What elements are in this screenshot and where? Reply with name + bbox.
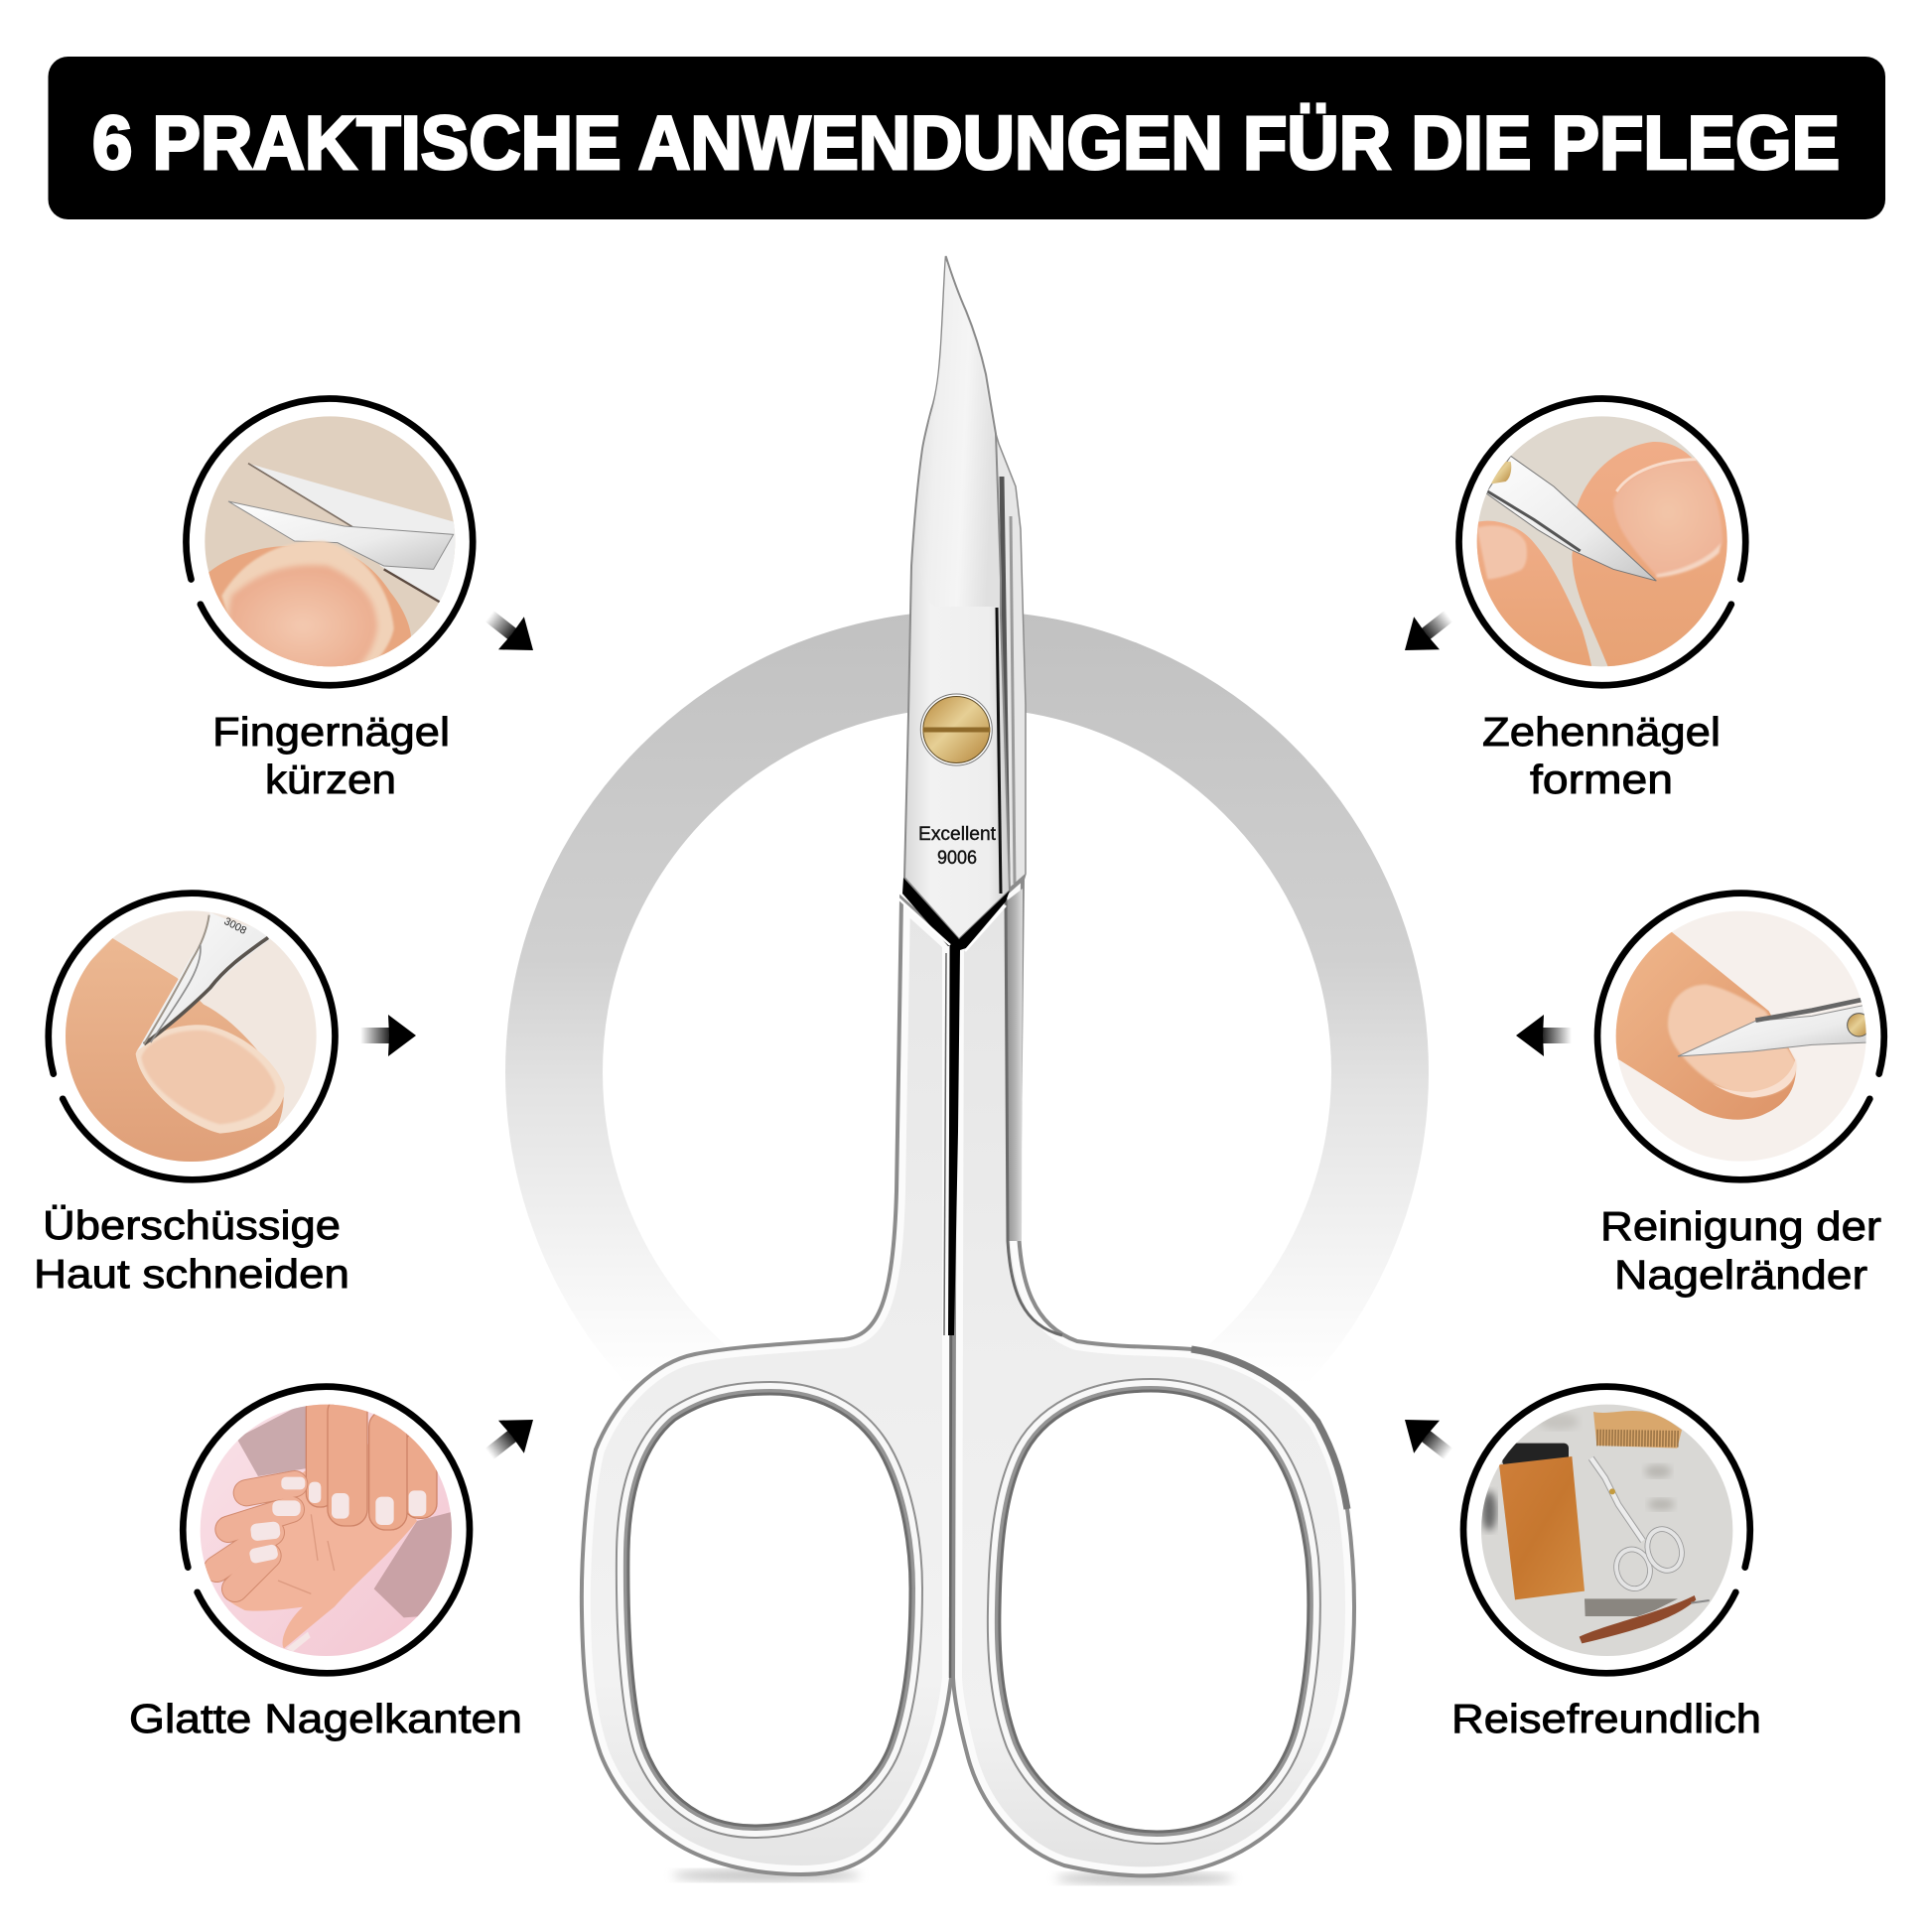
label: Reisefreundlich: Reisefreundlich <box>1451 1696 1761 1741</box>
label: Glatte Nagelkanten: Glatte Nagelkanten <box>129 1696 522 1741</box>
photo: fingernail <box>205 416 455 667</box>
title banner: 6 PRAKTISCHE ANWENDUNGEN FÜR DIE PFLEGE <box>92 101 1840 186</box>
engraving <box>918 824 997 869</box>
title banner <box>48 57 1885 219</box>
panel: Reisefreundlich <box>1459 1382 1757 1680</box>
label: Zehennägel formen: Zehennägel <box>1482 709 1721 755</box>
arrow: top left <box>475 599 546 667</box>
arrow: top right <box>1392 599 1463 667</box>
arrow: middle left <box>358 1015 416 1056</box>
engraving: 9006 <box>937 848 977 869</box>
panel: Zehennägel formen <box>1454 397 1752 695</box>
panel: Glatte Nagelkanten <box>179 1382 477 1680</box>
ring <box>1597 894 1884 1179</box>
ring <box>49 894 335 1179</box>
arrow: bottom right <box>1392 1403 1463 1471</box>
label: Überschüssige Haut schneiden <box>34 1202 349 1297</box>
engraving: Excellent <box>918 824 997 845</box>
photo: manicured hands <box>201 1404 452 1656</box>
label: Reinigung der Nagelränder: Nagelränder <box>1614 1252 1867 1298</box>
pivot screw <box>920 694 992 765</box>
label: Fingernägel kürzen: Fingernägel <box>212 709 450 755</box>
photo: cuticle <box>66 911 317 1162</box>
label: Überschüssige Haut schneiden: Überschüssige <box>43 1202 341 1248</box>
label: Reinigung der Nagelränder: Reinigung der <box>1600 1203 1881 1249</box>
label: Zehennägel formen: formen <box>1530 757 1673 802</box>
photo: nail edge cleaning <box>1616 911 1866 1162</box>
ring <box>1459 399 1745 685</box>
arrow: middle right <box>1516 1015 1574 1056</box>
label: Reinigung der Nagelränder <box>1600 1203 1881 1298</box>
label: Fingernägel kürzen <box>212 709 450 802</box>
ring <box>1463 1387 1750 1673</box>
ring <box>187 399 473 685</box>
photo: travel kit <box>1481 1404 1733 1656</box>
label: Überschüssige Haut schneiden: Haut schneiden <box>34 1251 349 1297</box>
arrow: bottom left <box>475 1403 546 1471</box>
panel: Reinigung der Nagelränder <box>1593 889 1891 1186</box>
scissors <box>582 256 1354 1884</box>
ring <box>183 1387 470 1673</box>
label: Fingernägel kürzen: kürzen <box>265 757 396 802</box>
panel: Fingernägel kürzen <box>179 397 477 695</box>
photo: toenail <box>1477 416 1727 667</box>
grey gradient ring behind scissors <box>554 659 1380 1485</box>
panel: Überschüssige Haut schneiden <box>45 889 343 1186</box>
photo: cuticle: 3008 <box>222 915 248 937</box>
label: Zehennägel formen <box>1482 709 1721 802</box>
